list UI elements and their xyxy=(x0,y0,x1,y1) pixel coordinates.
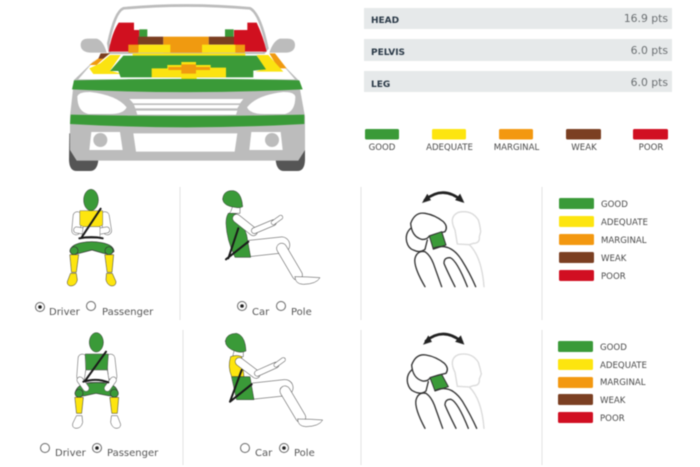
radio: driver / passenger xyxy=(36,302,154,318)
row: leg: 6.0 pts xyxy=(631,76,668,89)
car front view with colour ratings xyxy=(69,5,305,171)
vertical legend 1: MARGINAL xyxy=(601,236,647,246)
radio: driver / passenger: Driver xyxy=(49,307,81,318)
vertical legend 1: GOOD xyxy=(601,200,628,210)
windscreen rating patches xyxy=(109,23,267,53)
vertical legend 2 xyxy=(558,341,647,424)
vertical legend 2: MARGINAL xyxy=(600,378,646,388)
dummy side view: pole xyxy=(225,333,323,427)
radio: car / pole: Car xyxy=(252,307,270,318)
horizontal legend: GOOD xyxy=(369,143,396,153)
radio: car / pole xyxy=(238,302,312,318)
horizontal legend: WEAK xyxy=(571,143,597,153)
neck diagram 1 xyxy=(406,193,484,287)
vertical legend 1 xyxy=(559,198,648,282)
score rows xyxy=(364,8,672,92)
vertical legend 1: ADEQUATE xyxy=(601,218,648,228)
bonnet rating patches xyxy=(89,53,287,81)
radio: driver / passenger selected passenger: Passenger xyxy=(107,448,159,459)
row: head: 16.9 pts xyxy=(624,12,668,25)
row: head: HEAD xyxy=(371,16,399,26)
vertical legend 1: WEAK xyxy=(601,254,627,264)
row: leg: LEG xyxy=(371,80,390,90)
vertical legend 1: POOR xyxy=(601,272,626,282)
neck diagram 2 xyxy=(407,334,484,428)
vertical legend 2: POOR xyxy=(600,414,625,424)
radio: car / pole selected pole: Pole xyxy=(294,448,315,459)
radio: driver / passenger: Passenger xyxy=(102,307,154,318)
dummy side view: car xyxy=(223,191,320,284)
vertical legend 2: GOOD xyxy=(600,343,627,353)
row: head xyxy=(364,8,672,29)
horizontal legend: POOR xyxy=(639,143,663,153)
dividers xyxy=(180,187,542,465)
radio: car / pole: Pole xyxy=(291,307,312,318)
radio: car / pole selected pole xyxy=(240,444,315,459)
row: pelvis: 6.0 pts xyxy=(631,44,668,57)
dummy front view: driver xyxy=(67,189,116,286)
row: leg xyxy=(364,71,672,92)
row: pelvis xyxy=(364,39,672,61)
horizontal legend xyxy=(365,129,668,153)
radio: driver / passenger selected passenger: Driver xyxy=(55,448,87,459)
horizontal legend: ADEQUATE xyxy=(426,143,473,153)
radio: driver / passenger selected passenger xyxy=(40,444,159,459)
radio: car / pole selected pole: Car xyxy=(255,448,273,459)
dummy front view: passenger xyxy=(72,333,121,428)
vertical legend 2: ADEQUATE xyxy=(600,361,647,371)
radio labels xyxy=(36,302,315,459)
green bands xyxy=(70,79,304,127)
horizontal legend: MARGINAL xyxy=(494,143,539,153)
row: pelvis: PELVIS xyxy=(371,48,405,58)
vertical legend 2: WEAK xyxy=(600,396,626,406)
